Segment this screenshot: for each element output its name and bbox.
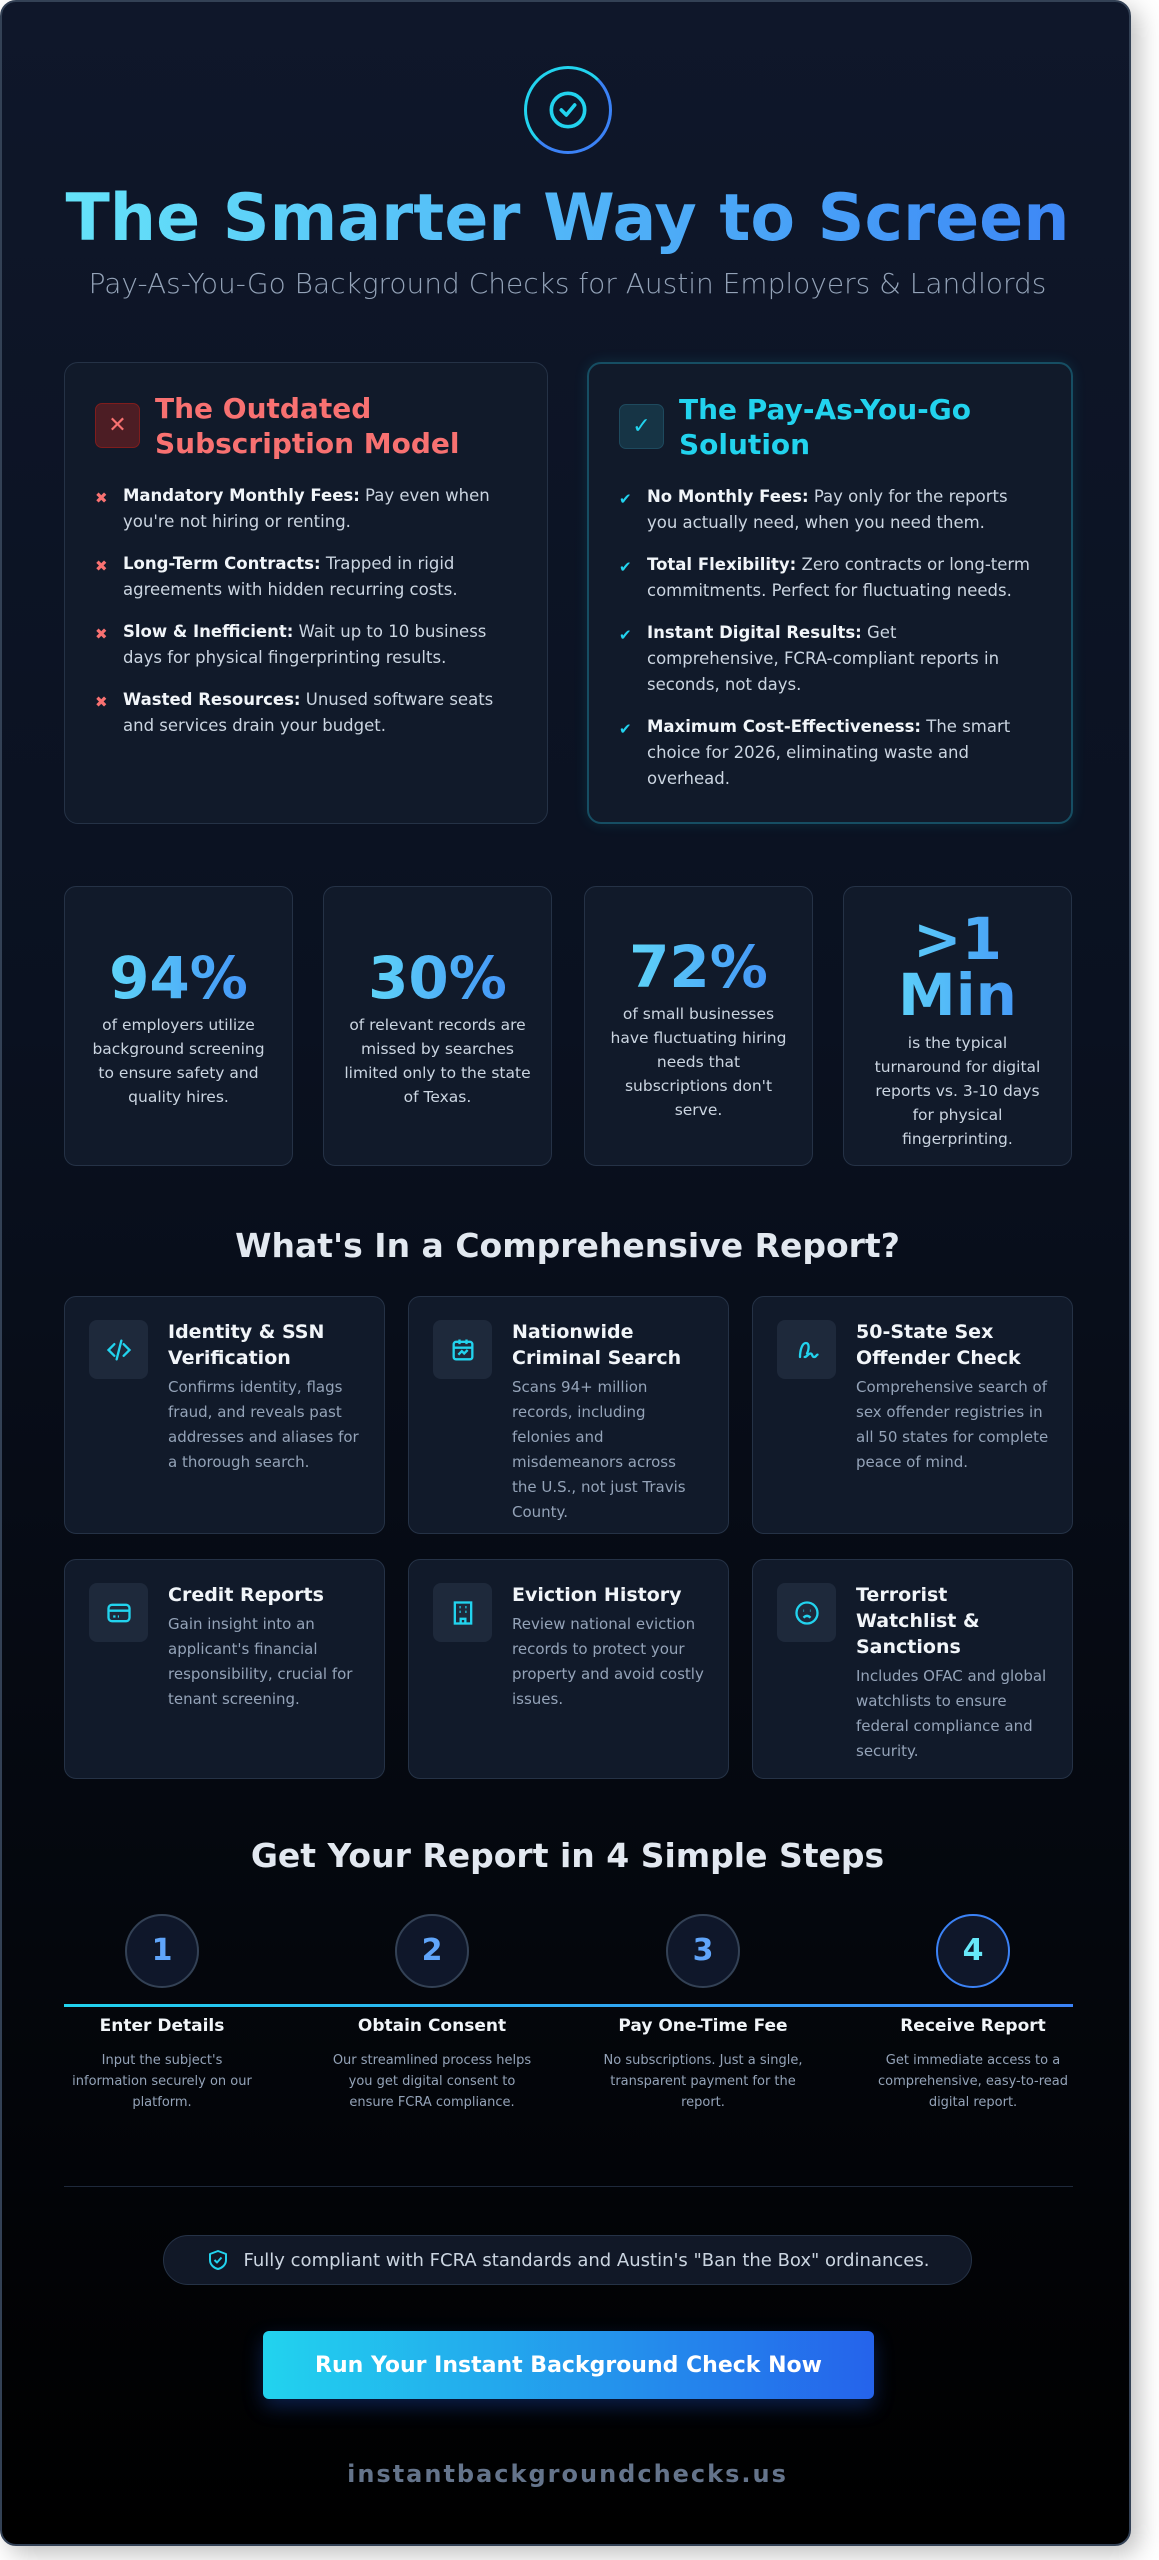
step 1: Input the subject's information securely on our platform. xyxy=(72,2053,252,2110)
feature: identity: Identity & SSN Verification xyxy=(168,1321,324,1369)
icon: check: ✓ xyxy=(632,414,651,439)
feature: terrorist watchlist: Terrorist Watchlist & Sanctions xyxy=(856,1584,980,1658)
panel: outdated subscription model: Long-Term Contracts: Trapped in rigid agreements with hidden recurring costs. xyxy=(123,554,458,599)
stat: 72% xyxy=(584,886,813,1166)
step 1 xyxy=(72,1914,252,2110)
stat: 94%: of employers utilize background screening to ensure safety and quality hires. xyxy=(92,1016,265,1106)
icon: hand xyxy=(777,1320,836,1379)
compliance badge xyxy=(163,2235,972,2285)
panel: pay-as-you-go solution: Instant Digital Results: Get comprehensive, FCRA-compliant reports in seconds, not days. xyxy=(647,623,999,694)
stat: 30%: of relevant records are missed by searches limited only to the state of Texas. xyxy=(344,1016,531,1106)
feature: eviction xyxy=(408,1559,729,1779)
icon: face xyxy=(777,1583,836,1642)
title: The Smarter Way to Screen xyxy=(65,181,1070,256)
panel: pay-as-you-go solution: ✔ xyxy=(619,558,632,576)
step 3 xyxy=(604,1914,802,2110)
panel: outdated subscription model: Wasted Resources: Unused software seats and services drain your budget. xyxy=(123,690,493,735)
stat: 72%: of small businesses have fluctuating hiring needs that subscriptions don't serve. xyxy=(611,1005,786,1119)
panel: outdated subscription model: ✖ xyxy=(95,557,108,575)
feature: credit xyxy=(64,1559,385,1779)
step 3: Pay One-Time Fee xyxy=(618,2016,788,2036)
panel: outdated subscription model: Mandatory Monthly Fees: Pay even when you're not hiring or renting. xyxy=(123,486,490,531)
feature: terrorist watchlist xyxy=(752,1559,1073,1779)
CTA button xyxy=(263,2331,874,2399)
feature: criminal xyxy=(408,1296,729,1534)
step 1: Enter Details xyxy=(100,2016,224,2036)
feature: identity xyxy=(64,1296,385,1534)
heading xyxy=(679,393,971,461)
icon: check circle xyxy=(524,66,612,154)
icon: x: ✕ xyxy=(108,413,127,438)
stat: 94% xyxy=(64,886,293,1166)
stat: >1 Min: >1 xyxy=(913,905,1002,973)
feature: sex offender xyxy=(752,1296,1073,1534)
stat: >1 Min: is the typical turnaround for digital reports vs. 3-10 days for physical fingerprinting. xyxy=(875,1034,1040,1148)
panel: pay-as-you-go solution: Maximum Cost-Effectiveness: The smart choice for 2026, eliminating waste and overhead. xyxy=(647,717,1010,788)
subtitle: Pay-As-You-Go Background Checks for Austin Employers & Landlords xyxy=(89,267,1046,300)
icon: code xyxy=(89,1320,148,1379)
step 4 xyxy=(878,1914,1068,2110)
footer url: instantbackgroundchecks.us xyxy=(347,2460,788,2488)
panel: pay-as-you-go solution xyxy=(587,362,1073,824)
panel: outdated subscription model: ✖ xyxy=(95,489,108,507)
icon: x xyxy=(95,403,140,448)
step 4: Get immediate access to a comprehensive, easy-to-read digital report. xyxy=(878,2053,1068,2110)
heading: The Pay-As-You-Go xyxy=(679,393,971,426)
feature: criminal: Scans 94+ million records, including felonies and misdemeanors across the U.S., not just Travis County. xyxy=(512,1378,686,1521)
icon: check xyxy=(619,404,664,449)
stat: 30%: 30% xyxy=(368,944,507,1012)
heading xyxy=(155,392,460,460)
heading: Subscription Model xyxy=(155,427,460,460)
panel: outdated subscription model: ✖ xyxy=(95,693,108,711)
panel: outdated subscription model xyxy=(64,362,548,824)
icon: card xyxy=(89,1583,148,1642)
panel: outdated subscription model: Slow & Inefficient: Wait up to 10 business days for physical fingerprinting results. xyxy=(123,622,486,667)
panel: pay-as-you-go solution: ✔ xyxy=(619,626,632,644)
step 2: Our streamlined process helps you get digital consent to ensure FCRA compliance. xyxy=(333,2053,531,2110)
step 2: Obtain Consent xyxy=(358,2016,506,2036)
step 4: 4 xyxy=(963,1933,983,1968)
step 2 xyxy=(333,1914,531,2110)
feature: sex offender: Comprehensive search of sex offender registries in all 50 states for complete peace of mind. xyxy=(856,1378,1048,1471)
heading: steps: Get Your Report in 4 Simple Steps xyxy=(251,1836,884,1875)
heading: The Outdated xyxy=(155,392,371,425)
feature: credit: Gain insight into an applicant's financial responsibility, crucial for tenant screening. xyxy=(168,1615,352,1708)
stat: 94%: 94% xyxy=(109,944,248,1012)
feature: sex offender: 50-State Sex Offender Check xyxy=(856,1321,1021,1369)
compliance badge: Fully compliant with FCRA standards and Austin's "Ban the Box" ordinances. xyxy=(244,2250,929,2270)
panel: pay-as-you-go solution: ✔ xyxy=(619,720,632,738)
feature: eviction: Review national eviction records to protect your property and avoid costly issues. xyxy=(512,1615,704,1708)
stat: 72%: 72% xyxy=(629,933,768,1001)
feature: criminal: Nationwide Criminal Search xyxy=(512,1321,681,1369)
feature: identity: Confirms identity, flags fraud, and reveals past addresses and aliases for a thorough search. xyxy=(168,1378,359,1471)
step 3: No subscriptions. Just a single, transparent payment for the report. xyxy=(604,2053,802,2110)
step 3: 3 xyxy=(693,1933,713,1968)
stat: >1 Min: Min xyxy=(898,961,1017,1029)
heading: comprehensive report: What's In a Comprehensive Report? xyxy=(235,1226,900,1265)
feature: terrorist watchlist: Includes OFAC and global watchlists to ensure federal compliance and security. xyxy=(856,1667,1046,1760)
panel: pay-as-you-go solution: Total Flexibility: Zero contracts or long-term commitments. Perfect for fluctuating needs. xyxy=(647,555,1030,600)
panel: pay-as-you-go solution: No Monthly Fees: Pay only for the reports you actually need, when you need them. xyxy=(647,487,1008,532)
CTA button: Run Your Instant Background Check Now xyxy=(315,2352,822,2378)
icon: building xyxy=(433,1583,492,1642)
step 4: Receive Report xyxy=(900,2016,1046,2036)
step 2: 2 xyxy=(422,1933,442,1968)
panel: pay-as-you-go solution: ✔ xyxy=(619,490,632,508)
panel: outdated subscription model: ✖ xyxy=(95,625,108,643)
feature: credit: Credit Reports xyxy=(168,1584,324,1606)
stat: 30% xyxy=(323,886,552,1166)
timeline line xyxy=(64,2004,1073,2007)
icon: search box xyxy=(433,1320,492,1379)
feature: eviction: Eviction History xyxy=(512,1584,682,1606)
stat: >1 Min xyxy=(843,886,1072,1166)
step 1: 1 xyxy=(152,1933,172,1968)
heading: Solution xyxy=(679,428,810,461)
